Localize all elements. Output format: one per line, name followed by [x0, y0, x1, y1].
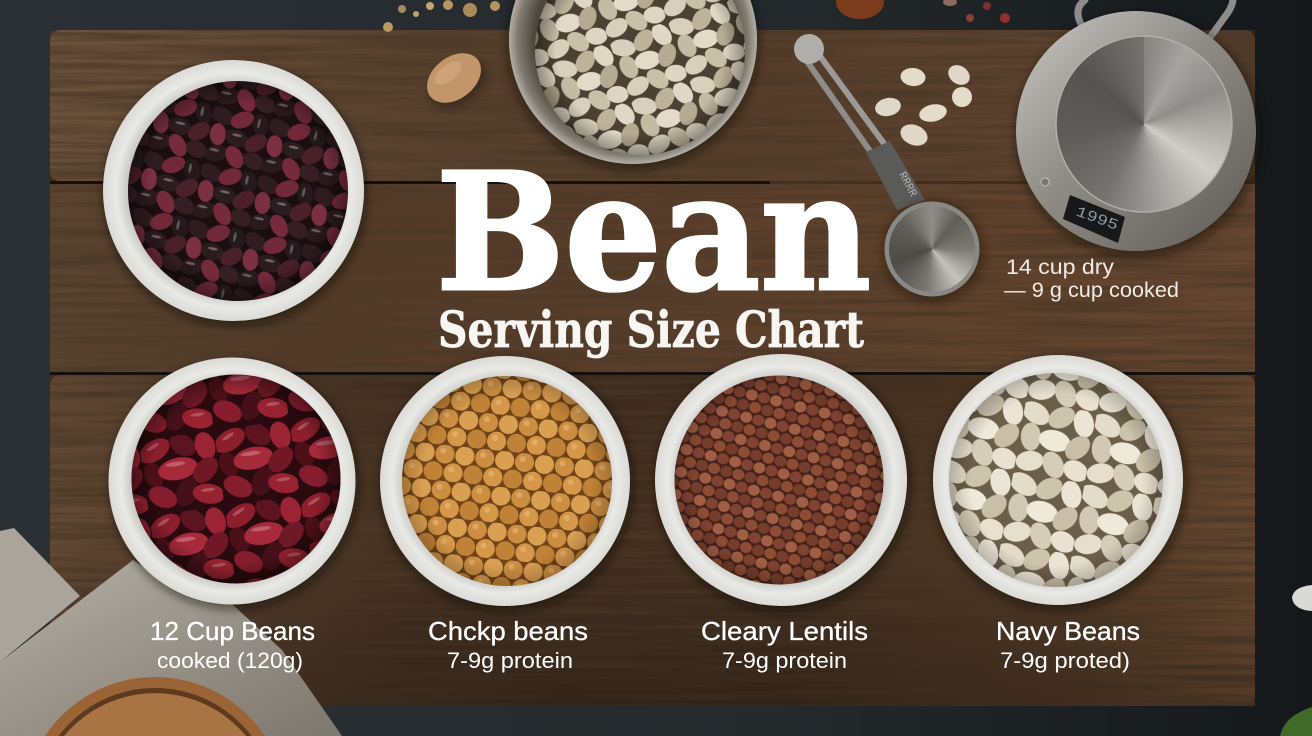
bowl: black beans	[103, 60, 366, 326]
label: navy beans: 7-9g proted)	[1000, 648, 1130, 673]
label: chickpeas: 7-9g protein	[447, 648, 573, 673]
subtitle: Serving Size Chart: Serving Size Chart	[438, 300, 864, 359]
icon: orange jar and red beans at top	[836, 0, 1010, 23]
side note: serving measure	[1004, 256, 1179, 302]
bowl: lentils	[655, 354, 910, 611]
label: lentils: 7-9g protein	[722, 648, 847, 673]
metal bowl of white beans	[507, 0, 759, 170]
label: lentils	[701, 616, 868, 673]
folded linen cloth	[0, 528, 342, 736]
label: navy beans	[996, 616, 1140, 673]
green leaf at bottom right	[1280, 707, 1312, 736]
bowl: chickpeas	[380, 356, 633, 611]
label: lentils: Cleary Lentils	[701, 616, 868, 646]
title: Bean: Bean	[436, 138, 871, 328]
kitchen scale	[1016, 0, 1260, 257]
label: kidney beans	[150, 616, 315, 673]
measuring spoon	[794, 34, 983, 302]
scattered crumbs at top	[383, 0, 500, 32]
bowl: navy beans	[933, 355, 1186, 610]
kitchen scale: 1995	[1073, 204, 1120, 235]
side note: serving measure: 14 cup dry	[1006, 256, 1115, 279]
icon: whole nut	[417, 43, 494, 118]
label: navy beans: Navy Beans	[996, 616, 1140, 646]
label: kidney beans: cooked (120g)	[157, 648, 303, 673]
side note: serving measure: — 9 g cup cooked	[1004, 279, 1179, 302]
measuring spoon: RRRR	[895, 170, 919, 200]
label: kidney beans: 12 Cup Beans	[150, 616, 315, 646]
bowl: kidney beans	[108, 358, 358, 609]
round wooden plate	[45, 677, 265, 736]
small white beans scattered	[873, 61, 974, 150]
label: chickpeas	[428, 616, 588, 673]
label: chickpeas: Chckp beans	[428, 616, 588, 646]
white object at right edge	[1292, 585, 1312, 611]
